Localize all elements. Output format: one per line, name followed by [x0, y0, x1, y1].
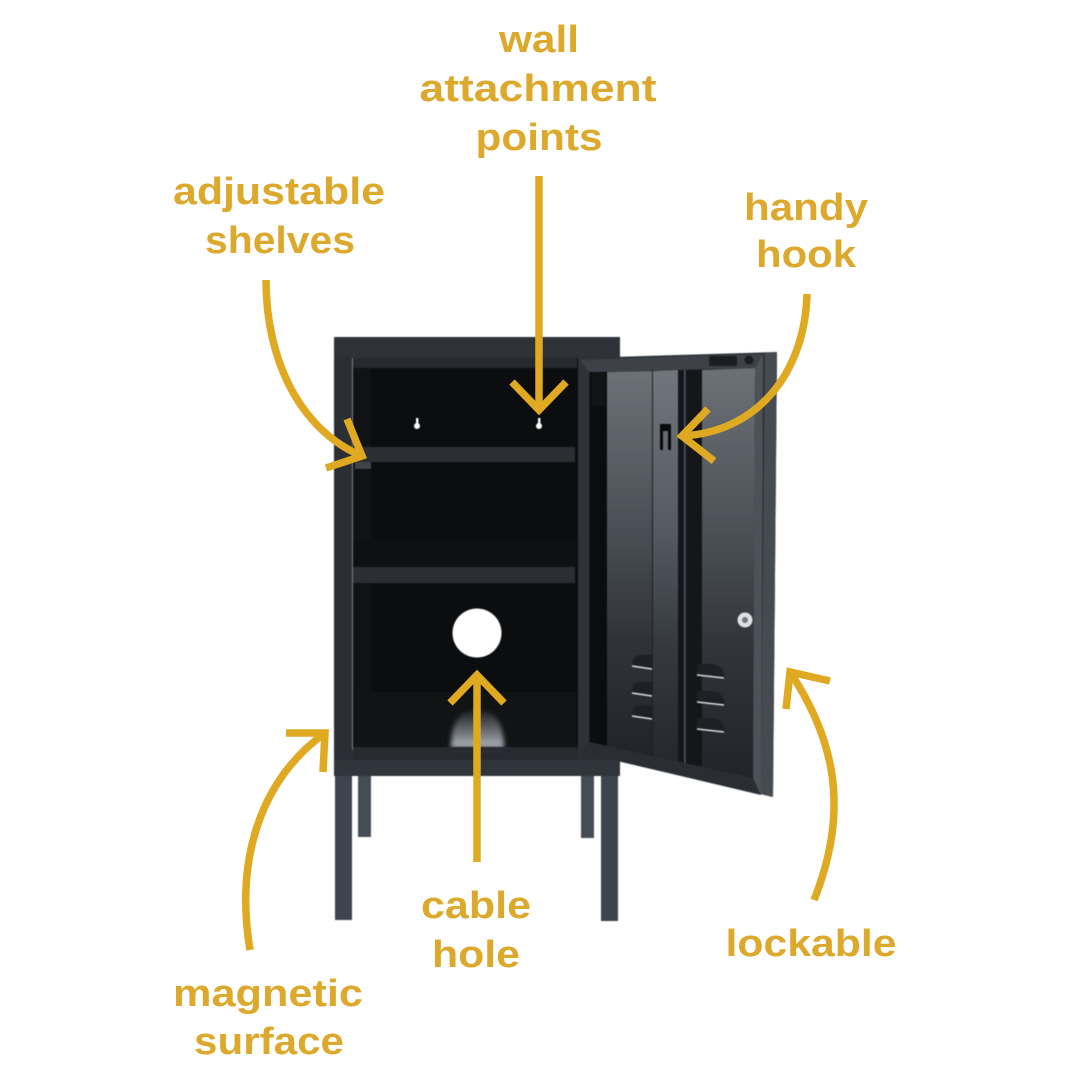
label: adjustable shelves: adjustable: [173, 171, 385, 213]
back legs: [358, 774, 594, 838]
label: cable hole: hole: [432, 934, 520, 976]
label: adjustable shelves: [173, 171, 385, 262]
arrow: wall attachment: [512, 176, 566, 410]
cable hole: [452, 608, 502, 658]
arrow: adjustable shelves: [266, 280, 362, 468]
door bottom frame: [580, 742, 761, 795]
label: wall attachment points: [420, 19, 657, 159]
floor light reflection: [451, 710, 504, 748]
top door label and screw: [709, 356, 754, 366]
cabinet interior: [352, 358, 578, 750]
label: magnetic surface: surface: [194, 1021, 344, 1063]
shelf clip: [355, 462, 371, 469]
door channel: [678, 370, 702, 767]
wall attachment keyholes: [414, 418, 542, 429]
lock: [738, 612, 752, 628]
front legs: [335, 770, 618, 921]
label: magnetic surface: [173, 973, 363, 1063]
label: magnetic surface: magnetic: [173, 973, 363, 1015]
arrow: cable hole: [450, 675, 504, 862]
door top frame: [580, 354, 763, 372]
door inner recess: [589, 368, 755, 778]
handy hook: [660, 424, 671, 450]
label: wall attachment points: attachment: [420, 68, 657, 110]
door vent shading: [632, 655, 725, 732]
label: handy hook: [744, 187, 868, 276]
label: handy hook: hook: [756, 234, 857, 276]
door panel right: [702, 368, 755, 778]
label: handy hook: handy: [744, 187, 868, 229]
open door: [578, 352, 777, 797]
cabinet body frame: [334, 337, 620, 776]
arrow: handy hook: [682, 294, 807, 461]
label: cable hole: cable: [421, 885, 531, 927]
door panel left: [607, 371, 652, 756]
label: lockable: lockable: [726, 923, 896, 965]
label: cable hole: [421, 885, 531, 976]
label: wall attachment points: wall: [498, 19, 579, 61]
arrow: magnetic surface: [246, 733, 325, 950]
arrow: lockable: [786, 672, 834, 900]
door right frame: [753, 354, 763, 795]
label: wall attachment points: points: [476, 117, 602, 159]
door outer shell: [578, 352, 777, 797]
adjustable shelves: [353, 447, 575, 583]
label: adjustable shelves: shelves: [205, 220, 355, 262]
door vent slits: [632, 666, 724, 732]
door hinge gap: [590, 372, 607, 746]
door hinge: [592, 372, 605, 406]
locker: [334, 337, 777, 921]
door centre strip: [653, 370, 678, 762]
